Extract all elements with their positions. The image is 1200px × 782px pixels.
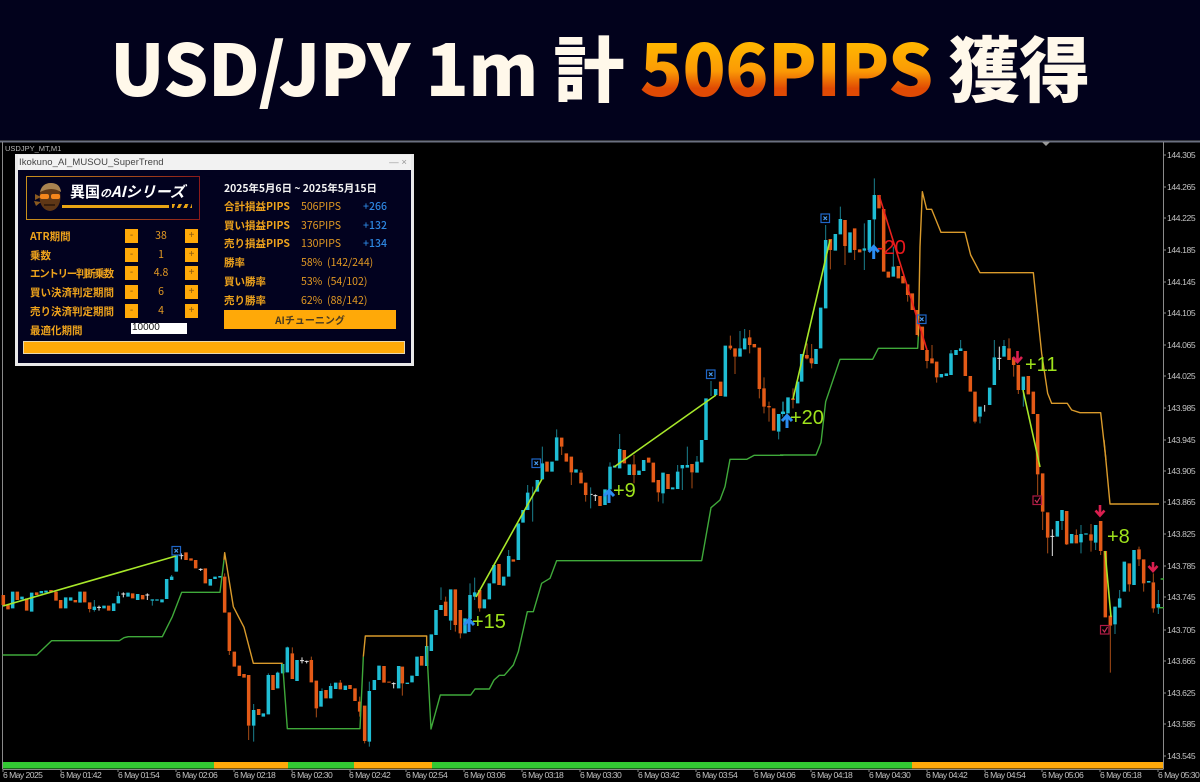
parameter labels: 売り決済判定期間 [30, 304, 114, 319]
optimisation input: 10000 [132, 322, 160, 333]
time axis: 6 May 04:42 [926, 770, 968, 780]
profit labels: +11 [1025, 354, 1057, 376]
panel title bar: Ikokuno_AI_MUSOU_SuperTrend [19, 157, 164, 168]
parameter steppers: 38 [155, 228, 167, 243]
doji candles [97, 347, 1054, 688]
parameter labels: 乗数 [30, 248, 51, 263]
logo banner [26, 176, 200, 220]
exit markers: sell [1033, 496, 1109, 634]
parameter steppers: - [130, 249, 133, 260]
time axis: 6 May 2025 [3, 770, 43, 780]
statistics table: 売り勝率 [224, 293, 266, 308]
parameter steppers: - [130, 286, 133, 297]
time axis: 6 May 04:18 [811, 770, 853, 780]
parameter steppers: - [130, 267, 133, 278]
entry arrows: buy [464, 246, 879, 632]
panel: Ikokuno AI MUSOU SuperTrend [15, 154, 414, 366]
symbol label: USDJPY_MT,M1 [5, 144, 61, 153]
supertrend uptrend line [3, 337, 1164, 729]
optimisation input [131, 323, 187, 334]
price axis: 143.705 [1167, 625, 1196, 635]
panel title bar [18, 155, 411, 170]
profit labels: +15 [472, 611, 506, 633]
price axis: 143.825 [1167, 529, 1196, 539]
AI tuning button: AIチューニング [275, 312, 345, 327]
time axis: 6 May 01:42 [60, 770, 102, 780]
price axis: 144.025 [1167, 371, 1196, 381]
parameter steppers: + [189, 230, 194, 241]
parameter labels: エントリー判断乗数 [30, 266, 113, 281]
time axis: 6 May 01:54 [118, 770, 160, 780]
panel body [18, 170, 411, 363]
supertrend downtrend line [224, 192, 1159, 663]
time axis: 6 May 02:42 [349, 770, 391, 780]
price axis: 143.985 [1167, 403, 1196, 413]
price axis: 144.105 [1167, 308, 1196, 318]
time axis [3, 769, 1200, 780]
time axis: 6 May 02:30 [291, 770, 333, 780]
price axis [1163, 150, 1196, 761]
trend status strip [3, 762, 1163, 768]
statistics table: 合計損益PIPS [224, 199, 290, 214]
statistics table: +266 [363, 199, 387, 214]
progress bar [23, 341, 405, 354]
time axis: 6 May 03:30 [580, 770, 622, 780]
statistics table: 62% (88/142) [301, 293, 367, 308]
price axis: 144.065 [1167, 340, 1196, 350]
time axis: 6 May 03:54 [696, 770, 738, 780]
time axis: 6 May 04:30 [869, 770, 911, 780]
price axis: 144.265 [1167, 182, 1196, 192]
losing trade line [879, 195, 927, 350]
date range: 2025年5月6日 ~ 2025年5月15日 [224, 180, 377, 195]
price axis: 144.185 [1167, 245, 1196, 255]
time axis: 6 May 03:42 [638, 770, 680, 780]
parameter labels: 買い決済判定期間 [30, 285, 114, 300]
bullish candles [13, 195, 1158, 742]
profit labels: +20 [790, 407, 824, 429]
profit labels [472, 354, 1130, 633]
statistics table: 376PIPS [301, 218, 341, 233]
AI tuning button [224, 310, 396, 329]
parameter labels: 最適化期間 [30, 323, 82, 338]
statistics table: 53% (54/102) [301, 274, 367, 289]
profit labels: +8 [1107, 526, 1130, 548]
time axis: 6 May 05:30 [1158, 770, 1200, 780]
winning trade lines [3, 240, 1111, 617]
price axis: 143.745 [1167, 592, 1196, 602]
parameter steppers: 4.8 [154, 265, 168, 280]
logo dashes [172, 204, 192, 208]
time axis: 6 May 03:06 [464, 770, 506, 780]
price axis: 143.865 [1167, 497, 1196, 507]
time axis: 6 May 03:18 [522, 770, 564, 780]
logo underline [62, 205, 169, 208]
price axis: 143.625 [1167, 688, 1196, 698]
parameter steppers: 6 [158, 284, 164, 299]
logo text: 異国のAIシリーズ [70, 181, 185, 202]
statistics table: +134 [363, 236, 387, 251]
parameter steppers: 4 [158, 303, 164, 318]
time axis: 6 May 02:06 [176, 770, 218, 780]
time axis: 6 May 04:54 [984, 770, 1026, 780]
statistics table: 58% (142/244) [301, 255, 373, 270]
title: USD/JPY 1m 計 506PIPS 獲得 [110, 15, 1090, 117]
time axis: 6 May 02:18 [234, 770, 276, 780]
statistics table: 買い損益PIPS [224, 218, 290, 233]
parameter steppers: + [189, 249, 194, 260]
price axis: 143.545 [1167, 751, 1196, 761]
statistics table: 買い勝率 [224, 274, 266, 289]
price axis: 144.225 [1167, 213, 1196, 223]
icon: face with sunglasses [34, 183, 61, 211]
price axis: 143.785 [1167, 561, 1196, 571]
price axis: 144.305 [1167, 150, 1196, 160]
price axis: 143.665 [1167, 656, 1196, 666]
parameter labels: ATR期間 [30, 229, 71, 244]
parameter steppers: - [130, 230, 133, 241]
parameter steppers [125, 228, 198, 318]
price axis: 143.905 [1167, 466, 1196, 476]
parameter labels [30, 229, 114, 338]
price axis: 143.945 [1167, 435, 1196, 445]
statistics table: +132 [363, 218, 387, 233]
time axis: 6 May 04:06 [754, 770, 796, 780]
price axis: 143.585 [1167, 719, 1196, 729]
statistics table: 506PIPS [301, 199, 341, 214]
wicks [90, 178, 1158, 747]
parameter steppers: - [130, 305, 133, 316]
bearish candles [3, 195, 1153, 741]
loss label: -20 [877, 237, 906, 259]
time axis: 6 May 05:06 [1042, 770, 1084, 780]
exit markers: buy [172, 214, 926, 555]
parameter steppers: + [189, 305, 194, 316]
parameter steppers: + [189, 267, 194, 278]
parameter steppers: + [189, 286, 194, 297]
profit labels: +9 [613, 480, 636, 502]
statistics table: 130PIPS [301, 236, 341, 251]
entry arrows: sell [1013, 351, 1158, 571]
statistics table: 勝率 [224, 255, 245, 270]
statistics table [224, 199, 387, 308]
time axis: 6 May 05:18 [1100, 770, 1142, 780]
parameter steppers: 1 [158, 247, 164, 262]
price axis: 144.145 [1167, 277, 1196, 287]
statistics table: 売り損益PIPS [224, 236, 290, 251]
panel title bar: — × [389, 157, 407, 168]
time axis: 6 May 02:54 [406, 770, 448, 780]
